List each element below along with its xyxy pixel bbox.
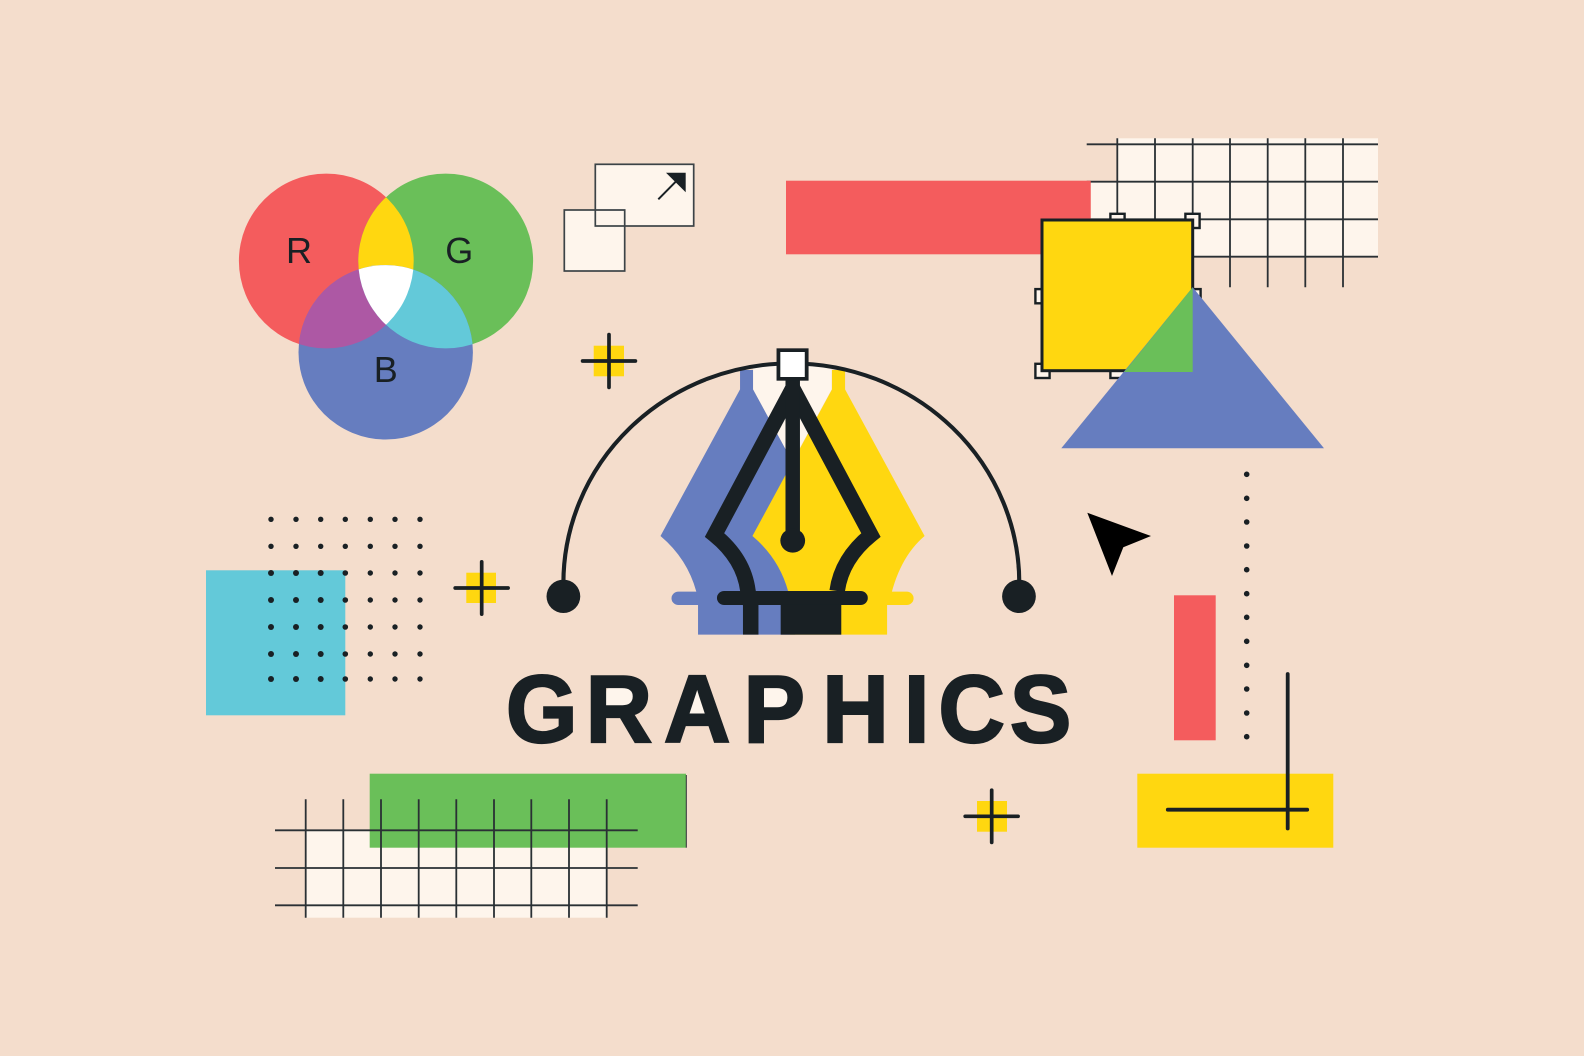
RGB venn diagram	[239, 174, 533, 439]
red vertical bar	[1174, 595, 1216, 740]
plus mark: top	[583, 335, 635, 387]
dot matrix	[268, 517, 423, 682]
yellow offset nib	[752, 370, 925, 635]
pen tool nib with bezier arc	[547, 350, 1036, 635]
RGB venn diagram: B	[374, 349, 398, 390]
RGB venn diagram: R	[286, 230, 312, 271]
selection handles	[1035, 214, 1201, 378]
black nib outline	[715, 380, 871, 635]
cursor arrow	[1087, 513, 1151, 576]
blue triangle with green overlap	[1061, 287, 1324, 448]
red horizontal bar	[786, 181, 1091, 254]
illustration: graphics design composition	[206, 138, 1378, 918]
dotted column	[1244, 472, 1249, 740]
yellow crop rectangle with lines	[1137, 674, 1333, 848]
green horizontal bar	[370, 774, 686, 848]
plus mark: left	[455, 562, 508, 614]
resize window icon	[564, 164, 694, 271]
top right grid panel	[1087, 138, 1378, 287]
plus mark: bottom	[965, 790, 1018, 842]
arc end point right	[1002, 580, 1036, 613]
blue offset nib	[660, 370, 833, 635]
title: GRAPHICS	[506, 655, 1071, 762]
bezier arc	[563, 363, 1019, 583]
cream centre highlight	[753, 363, 832, 462]
cyan square	[206, 570, 345, 715]
bottom left grid panel	[275, 774, 686, 918]
title counters	[606, 687, 794, 718]
yellow selected square	[1042, 220, 1193, 371]
arc end point left	[547, 580, 580, 613]
RGB venn diagram: G	[445, 230, 473, 271]
anchor point square	[778, 350, 807, 379]
